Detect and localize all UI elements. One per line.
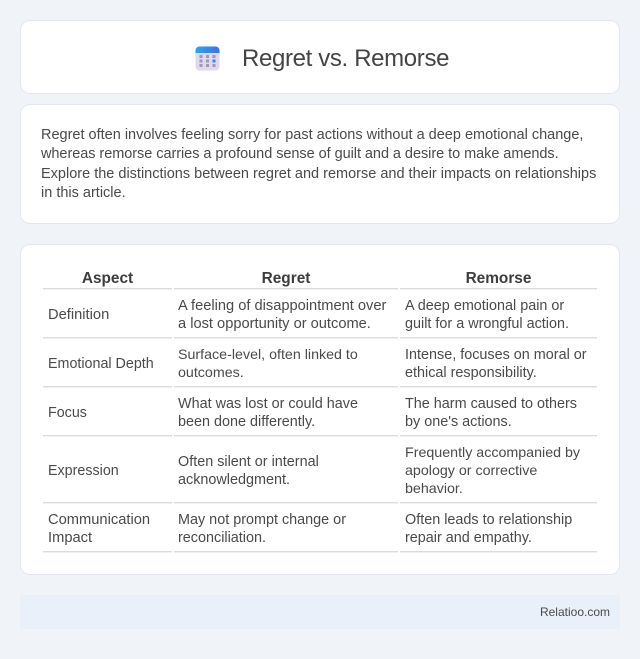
row: communication impact: Often leads to relationship repair and empathy.	[405, 512, 572, 546]
row: emotional depth: Emotional Depth	[48, 356, 154, 372]
row: communication impact: Communication Impact	[48, 512, 150, 546]
panel: comparison table	[20, 244, 620, 575]
table header: Regret	[262, 270, 310, 287]
row: emotional depth: Surface-level, often linked to outcomes.	[178, 347, 358, 381]
footer bar	[20, 595, 620, 629]
row: definition	[43, 298, 597, 339]
row: expression: Often silent or internal acknowledgment.	[178, 454, 319, 488]
row: emotional depth: Intense, focuses on moral or ethical responsibility.	[405, 347, 587, 381]
row: definition: A deep emotional pain or guilt for a wrongful action.	[405, 298, 569, 332]
table header: Remorse	[466, 270, 531, 287]
text: introduction: Regret often involves feeling sorry for past actions without a deep emotional change, whereas remorse carries a profound sense of guilt and a desire to make amends. Explore the distinctions between regret and remorse and their impacts on relationships in this article.	[41, 127, 596, 201]
row: focus: Focus	[48, 405, 87, 421]
row: definition: A feeling of disappointment over a lost opportunity or outcome.	[178, 298, 386, 332]
row: definition: Definition	[48, 307, 109, 323]
row: communication impact: May not prompt change or reconciliation.	[178, 512, 346, 546]
row: emotional depth	[43, 347, 597, 388]
row: communication impact	[43, 512, 597, 553]
row: expression	[43, 445, 597, 504]
panel: introduction	[20, 104, 620, 224]
row: expression: Expression	[48, 463, 119, 479]
title: Regret vs. Remorse	[242, 45, 449, 72]
row: focus: What was lost or could have been done differently.	[178, 396, 358, 430]
row: focus	[43, 396, 597, 437]
footer credit: Relatioo.com	[540, 605, 610, 619]
panel: title card	[20, 20, 620, 94]
row: expression: Frequently accompanied by apology or corrective behavior.	[405, 445, 580, 497]
table header: Aspect	[82, 270, 133, 287]
table header	[43, 270, 597, 290]
icon: calendar	[196, 46, 220, 70]
row: focus: The harm caused to others by one's actions.	[405, 396, 577, 430]
